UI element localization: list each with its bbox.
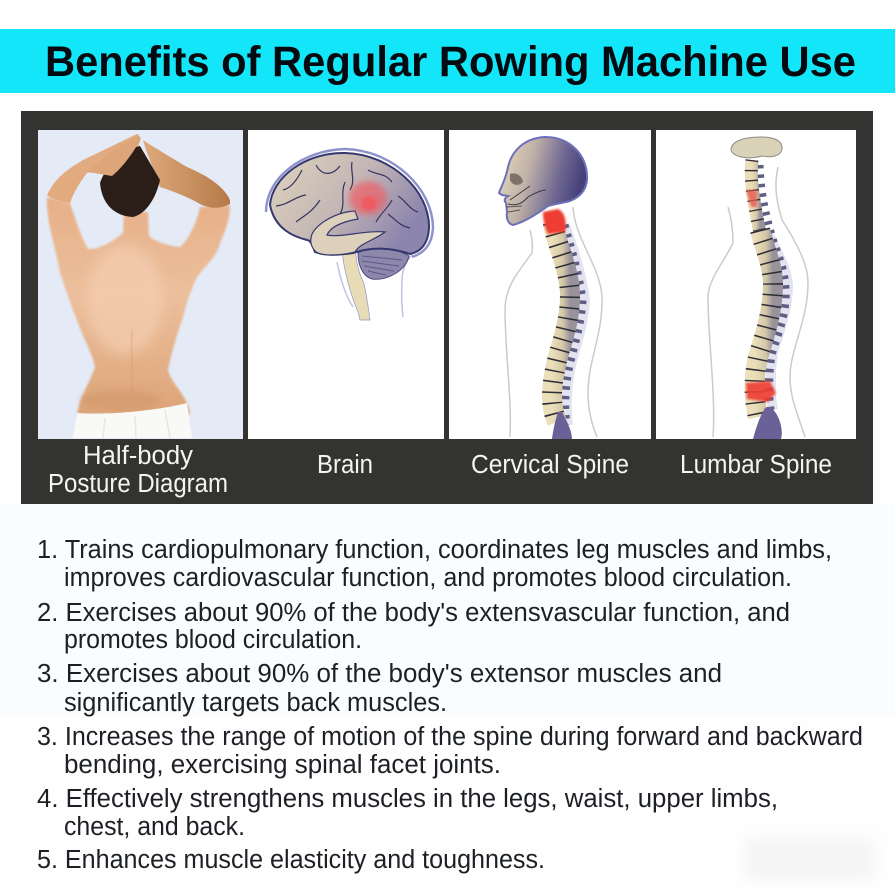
panel: half-body posture xyxy=(38,130,243,439)
benefit 3 (second): bending, exercising spinal facet joints. xyxy=(64,751,501,779)
caption: half-body posture diagram: Posture Diagram xyxy=(48,470,228,498)
title banner xyxy=(0,29,895,93)
image panel frame xyxy=(21,111,873,504)
illustration: woman's back xyxy=(47,134,230,438)
benefit 3 (second): 3. Increases the range of motion of the spine during forward and backward xyxy=(37,723,863,751)
caption: brain: Brain xyxy=(317,451,373,479)
benefit 3 (second) xyxy=(37,723,863,779)
panel: cervical spine xyxy=(449,130,651,439)
benefit 1: improves cardiovascular function, and promotes blood circulation. xyxy=(64,564,792,592)
benefit 2: 2. Exercises about 90% of the body's extensvascular function, and xyxy=(37,599,790,627)
title: Benefits of Regular Rowing Machine Use xyxy=(45,38,856,86)
benefit 2: promotes blood circulation. xyxy=(64,626,362,654)
caption: half-body posture diagram xyxy=(48,442,228,498)
benefit 3: significantly targets back muscles. xyxy=(64,689,447,717)
illustration: cervical spine and skull xyxy=(499,137,602,439)
benefit 5: 5. Enhances muscle elasticity and toughness. xyxy=(37,846,545,874)
illustration: lumbar spine xyxy=(708,137,808,439)
caption: half-body posture diagram: Half-body xyxy=(83,442,193,470)
panel: brain xyxy=(248,130,444,439)
benefits list xyxy=(37,536,863,874)
benefit 3: 3. Exercises about 90% of the body's extensor muscles and xyxy=(37,660,722,688)
panel: lumbar spine xyxy=(656,130,856,439)
benefit 1 xyxy=(37,536,832,592)
benefit 4: 4. Effectively strengthens muscles in the legs, waist, upper limbs, xyxy=(37,785,778,813)
caption: lumbar spine: Lumbar Spine xyxy=(680,451,832,479)
illustration: brain xyxy=(266,149,433,320)
benefit 4 xyxy=(37,785,778,841)
caption: cervical spine: Cervical Spine xyxy=(471,451,629,479)
benefit 2 xyxy=(37,599,790,654)
benefit 1: 1. Trains cardiopulmonary function, coordinates leg muscles and limbs, xyxy=(37,536,832,564)
benefit 3 xyxy=(37,660,722,717)
benefit 4: chest, and back. xyxy=(64,813,245,841)
